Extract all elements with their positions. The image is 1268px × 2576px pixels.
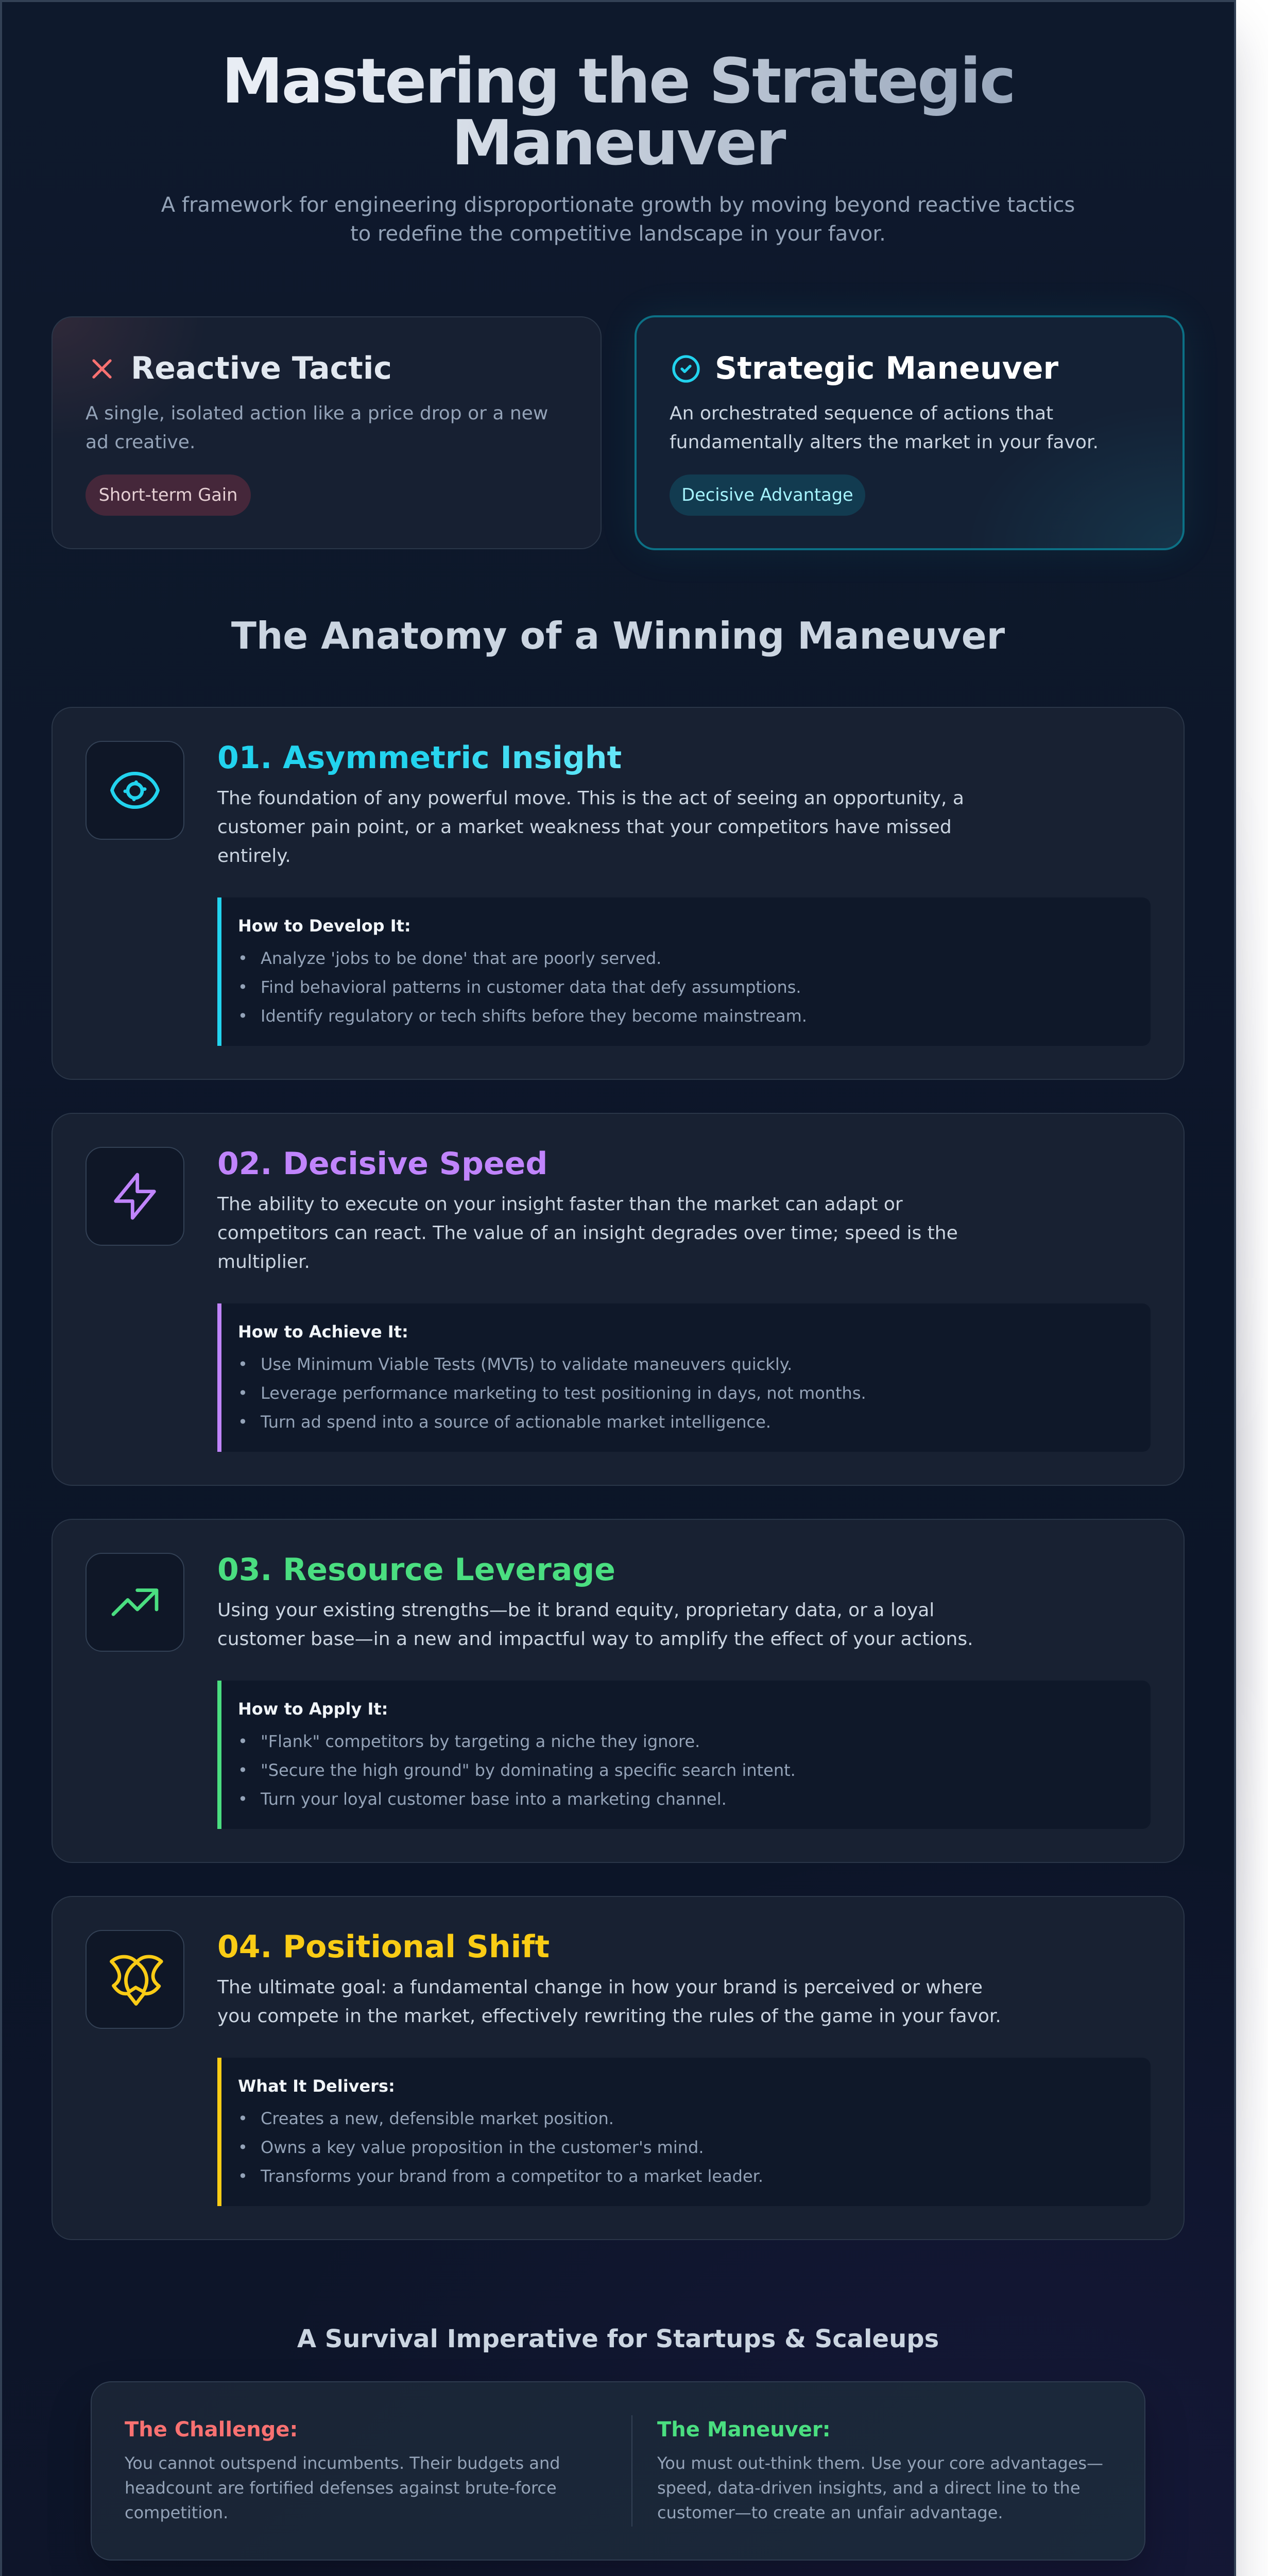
callout list: • xyxy=(238,1732,248,1751)
text: strategic description xyxy=(670,403,1099,453)
subtitle xyxy=(161,193,1075,246)
heading: maneuver: The Maneuver: xyxy=(657,2418,831,2442)
text: 02 description: The ability to execute on your insight faster than the market can adapt or xyxy=(217,1194,903,1215)
text: reactive description: ad creative. xyxy=(85,432,195,453)
text: 01 description xyxy=(217,788,964,867)
callout list xyxy=(238,1732,796,1809)
panel: strategic maneuver xyxy=(635,315,1185,550)
callout list: • xyxy=(238,1006,248,1026)
text: maneuver: customer—to create an unfair advantage. xyxy=(657,2503,1003,2522)
panel: 02 decisive speed xyxy=(52,1113,1185,1486)
callout list: Leverage performance marketing to test positioning in days, not months. xyxy=(261,1383,866,1403)
heading: 03: 03. Resource Leverage xyxy=(217,1552,615,1588)
heading: 01: 01. Asymmetric Insight xyxy=(217,740,622,776)
text: 04 description: The ultimate goal: a fundamental change in how your brand is perceived or where xyxy=(217,1977,983,1998)
callout list: Find behavioral patterns in customer data that defy assumptions. xyxy=(261,977,801,997)
callout list: • xyxy=(238,1383,248,1403)
text: 02 description: competitors can react. The value of an insight degrades over time; speed is the xyxy=(217,1223,958,1244)
text: maneuver xyxy=(657,2453,1103,2522)
callout heading: How to Apply It: xyxy=(238,1699,388,1719)
text: challenge: You cannot outspend incumbents. Their budgets and xyxy=(125,2453,560,2473)
badge: short-term gain: Short-term Gain xyxy=(99,485,237,505)
text: 01 description: customer pain point, or a market weakness that your competitors have missed xyxy=(217,817,952,838)
icon: eye xyxy=(85,741,184,840)
icon: trending up xyxy=(85,1553,184,1652)
text: challenge: headcount are fortified defenses against brute-force xyxy=(125,2478,557,2498)
text: reactive description xyxy=(85,403,548,453)
callout list: • xyxy=(238,2166,248,2186)
icon: cross xyxy=(92,359,112,379)
heading: strategic maneuver: Strategic Maneuver xyxy=(715,350,1058,386)
text: 04 description xyxy=(217,1977,1001,2027)
callout list: • xyxy=(238,977,248,997)
callout list: Owns a key value proposition in the customer's mind. xyxy=(261,2138,704,2157)
text: 02 description: multiplier. xyxy=(217,1251,310,1273)
callout: how to develop xyxy=(217,897,1151,1046)
callout list: Use Minimum Viable Tests (MVTs) to validate maneuvers quickly. xyxy=(261,1354,792,1374)
badge: decisive advantage: Decisive Advantage xyxy=(681,485,853,505)
heading: reactive tactic: Reactive Tactic xyxy=(131,350,392,386)
text: strategic description: fundamentally alters the market in your favor. xyxy=(670,432,1099,453)
text: 03 description: Using your existing strengths—be it brand equity, proprietary data, or a loyal xyxy=(217,1600,934,1621)
heading: challenge: The Challenge: xyxy=(125,2418,298,2442)
callout: how to apply xyxy=(217,1681,1151,1829)
callout list: Turn ad spend into a source of actionable market intelligence. xyxy=(261,1412,771,1432)
text: 01 description: entirely. xyxy=(217,845,291,867)
subtitle: A framework for engineering disproportionate growth by moving beyond reactive tactics xyxy=(161,193,1075,217)
callout list: Identify regulatory or tech shifts before they become mainstream. xyxy=(261,1006,807,1026)
title: Mastering the Strategic xyxy=(221,46,1015,117)
subtitle: to redefine the competitive landscape in your favor. xyxy=(350,222,886,246)
text: challenge xyxy=(125,2453,560,2522)
callout list: Creates a new, defensible market position. xyxy=(261,2109,614,2128)
badge: short-term gain xyxy=(85,474,251,516)
column: the challenge xyxy=(125,2418,560,2522)
callout list xyxy=(238,948,807,1026)
text: 04 description: you compete in the market, effectively rewriting the rules of the game in your favor. xyxy=(217,2006,1001,2027)
callout list: • xyxy=(238,948,248,968)
heading: 02: 02. Decisive Speed xyxy=(217,1146,547,1182)
callout heading: How to Develop It: xyxy=(238,916,411,936)
callout list: • xyxy=(238,1760,248,1780)
panel: 03 resource leverage xyxy=(52,1519,1185,1863)
panel: reactive tactic xyxy=(52,316,602,549)
heading: anatomy: The Anatomy of a Winning Maneuver xyxy=(231,614,1005,657)
callout list xyxy=(238,1354,866,1432)
callout list: "Secure the high ground" by dominating a specific search intent. xyxy=(261,1760,796,1780)
text: maneuver: You must out-think them. Use your core advantages— xyxy=(657,2453,1103,2473)
icon: bolt xyxy=(85,1147,184,1246)
callout list: • xyxy=(238,1412,248,1432)
panel: 04 positional shift xyxy=(52,1896,1185,2240)
callout list: "Flank" competitors by targeting a niche they ignore. xyxy=(261,1732,700,1751)
callout list: • xyxy=(238,1789,248,1809)
heading: survival imperative: A Survival Imperative for Startups & Scaleups xyxy=(297,2325,939,2353)
callout list: • xyxy=(238,1354,248,1374)
panel: 01 asymmetric insight xyxy=(52,707,1185,1080)
callout list: • xyxy=(238,2138,248,2157)
callout list xyxy=(238,2109,763,2186)
callout heading: How to Achieve It: xyxy=(238,1322,408,1342)
text: reactive description: A single, isolated action like a price drop or a new xyxy=(85,403,548,424)
title xyxy=(0,51,1236,175)
heading: 04: 04. Positional Shift xyxy=(217,1929,550,1965)
callout list: Turn your loyal customer base into a marketing channel. xyxy=(261,1789,727,1809)
title: Maneuver xyxy=(452,108,784,179)
panel: challenge and maneuver xyxy=(91,2381,1145,2561)
callout: what it delivers xyxy=(217,2058,1151,2206)
text: maneuver: speed, data-driven insights, and a direct line to the xyxy=(657,2478,1081,2498)
text: 02 description xyxy=(217,1194,958,1273)
icon: check circle xyxy=(672,355,700,383)
callout heading: What It Delivers: xyxy=(238,2076,395,2096)
badge: decisive advantage xyxy=(670,474,865,516)
callout list: Analyze 'jobs to be done' that are poorly served. xyxy=(261,948,661,968)
column: the maneuver xyxy=(631,2415,1116,2527)
text: 01 description: The foundation of any powerful move. This is the act of seeing an opportunity, a xyxy=(217,788,964,809)
callout list: • xyxy=(238,2109,248,2128)
callout: how to achieve xyxy=(217,1303,1151,1452)
text: challenge: competition. xyxy=(125,2503,228,2522)
icon: shield xyxy=(85,1930,184,2029)
text: 03 description xyxy=(217,1600,973,1650)
text: 03 description: customer base—in a new and impactful way to amplify the effect of your actions. xyxy=(217,1629,973,1650)
callout list: Transforms your brand from a competitor to a market leader. xyxy=(261,2166,763,2186)
text: strategic description: An orchestrated sequence of actions that xyxy=(670,403,1053,424)
